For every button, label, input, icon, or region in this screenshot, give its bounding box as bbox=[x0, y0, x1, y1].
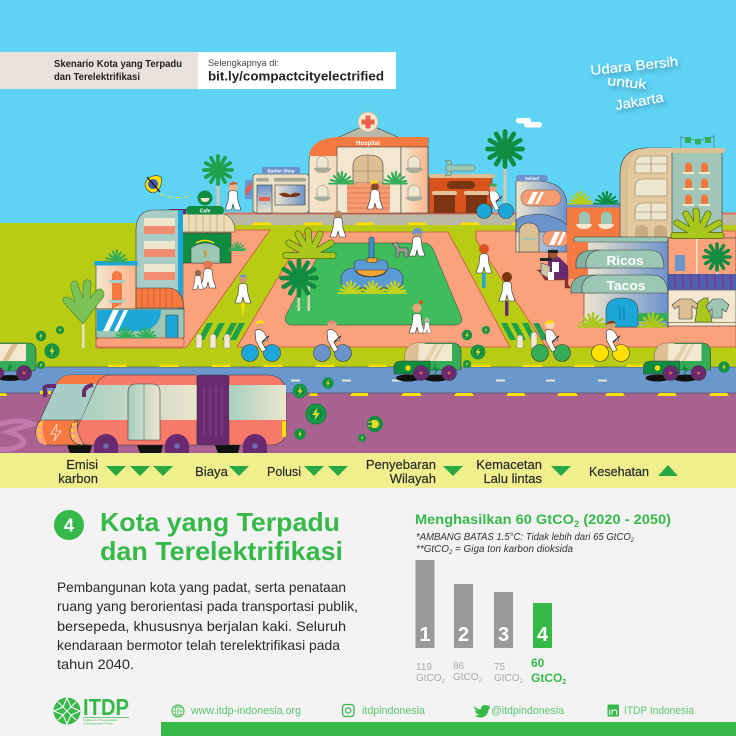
bar 3: GtCO bbox=[494, 673, 520, 684]
bus accordion joint bbox=[197, 375, 229, 445]
scenario description: ruang yang berorientasi pada transportasi publik, bbox=[57, 598, 358, 614]
bar 1 bbox=[416, 560, 446, 685]
school sign: School bbox=[525, 176, 539, 181]
bar 3: 2 bbox=[520, 679, 524, 685]
person on hospital steps bbox=[367, 180, 383, 209]
palm tree by cafe bbox=[204, 156, 232, 207]
school bbox=[516, 175, 569, 252]
back street bbox=[225, 212, 736, 225]
Ricos awning: Ricos bbox=[606, 253, 644, 268]
hospital cross emblem bbox=[358, 112, 378, 132]
indicator: cost bbox=[195, 464, 249, 479]
plug badge bbox=[367, 416, 383, 432]
logo emblem bbox=[54, 698, 80, 724]
cafe name sign: Cafe bbox=[200, 208, 211, 214]
road graffiti bbox=[0, 421, 33, 449]
indicator: carbon emissions: karbon bbox=[58, 471, 98, 486]
teal apartment building bbox=[136, 210, 183, 338]
background sky bbox=[0, 0, 736, 223]
person with child on lawn bbox=[409, 300, 425, 333]
hospital bbox=[309, 112, 428, 213]
scenario number badge bbox=[54, 510, 84, 540]
clothes shop bbox=[668, 274, 736, 326]
cyclist blue wheels bbox=[242, 320, 280, 362]
scenario description: Pembangunan kota yang padat, serta penataan bbox=[57, 579, 346, 595]
drone icon bbox=[145, 176, 190, 198]
bar 3: 75 bbox=[494, 662, 506, 673]
bar 4: 2 bbox=[562, 679, 566, 686]
dog bbox=[392, 242, 408, 257]
central lawn bbox=[285, 243, 462, 325]
low building left bbox=[94, 261, 184, 347]
header link: bit.ly/compactcityelectrified bbox=[208, 68, 384, 84]
slogan: clean air for Jakarta: Jakarta bbox=[614, 90, 665, 113]
cafe round sign bbox=[198, 190, 212, 206]
child and adult on left plaza bbox=[200, 260, 216, 288]
plants on low building bbox=[105, 242, 245, 338]
cafe building bbox=[160, 190, 235, 263]
bus rear segment bbox=[36, 375, 110, 445]
right plaza bbox=[476, 231, 736, 347]
electric bolt badges bbox=[36, 326, 730, 442]
bar 3 bbox=[494, 592, 524, 685]
palm tree by workshop bbox=[488, 132, 522, 206]
clouds bbox=[516, 118, 542, 128]
chart title: Menghasilkan 60 GtCO bbox=[415, 511, 567, 527]
indicator: carbon emissions bbox=[58, 457, 173, 486]
car left bbox=[0, 343, 36, 381]
indicator: pollution: Polusi bbox=[267, 464, 301, 479]
tall tan building bbox=[620, 148, 672, 237]
left plaza bbox=[96, 230, 270, 348]
bar 4: 4 bbox=[537, 624, 549, 646]
indicator: cost: Biaya bbox=[195, 464, 229, 479]
fountain plants bbox=[338, 282, 406, 293]
electric cars bbox=[0, 343, 710, 382]
crosswalk left bbox=[196, 323, 245, 348]
palm tree on plaza bbox=[282, 256, 316, 311]
barber shop bbox=[245, 167, 309, 213]
bar 4: GtCO bbox=[531, 671, 562, 685]
bar 1: GtCO bbox=[416, 673, 442, 684]
taco shop door bbox=[606, 298, 638, 327]
cyclist periwinkle wheels bbox=[314, 320, 352, 362]
person on top of lawn bbox=[330, 210, 346, 237]
car centre bbox=[394, 343, 461, 382]
fountain bbox=[341, 237, 403, 293]
header bar bbox=[0, 52, 396, 89]
purple busway bbox=[0, 393, 736, 453]
scenario description: tahun 2040. bbox=[57, 656, 134, 672]
chart title: (2020 - 2050) bbox=[579, 511, 671, 527]
indicator: health bbox=[589, 464, 678, 479]
header link: Selengkapnya di: bbox=[208, 58, 279, 69]
scenario description: kendaraan bermotor telah terelektrifikasi pada bbox=[57, 637, 340, 653]
indicator: sprawl bbox=[366, 457, 463, 486]
centre plaza bbox=[237, 232, 510, 347]
hospital window sills bbox=[314, 168, 423, 201]
plazas bbox=[96, 230, 736, 348]
logo wordmark: ITDP bbox=[83, 694, 129, 720]
person walking dog bbox=[409, 228, 425, 256]
teal tower bbox=[671, 135, 725, 237]
indicator: health: Kesehatan bbox=[589, 464, 649, 479]
bar 4 bbox=[531, 603, 566, 686]
bar 2: 86 bbox=[453, 661, 465, 672]
footer: twitter: @itdpindonesia bbox=[491, 705, 565, 717]
cyclist yellow wheels bbox=[592, 320, 630, 362]
leaf tree bbox=[63, 280, 104, 348]
blue road bbox=[0, 364, 736, 393]
slogan: clean air for Jakarta bbox=[590, 54, 679, 113]
scenario number badge: 4 bbox=[64, 516, 74, 536]
indicator: congestion bbox=[476, 457, 571, 486]
bus door bbox=[128, 384, 160, 440]
roof flags bbox=[681, 135, 714, 148]
chart title: 2 bbox=[574, 519, 579, 529]
bar chart bbox=[416, 560, 566, 686]
bus middle segment bbox=[70, 375, 197, 445]
large fan plant bbox=[286, 231, 333, 256]
indicator: congestion: Kemacetan bbox=[476, 457, 542, 472]
footer: linkedin: ITDP Indonesia bbox=[624, 705, 695, 717]
wrench sign bbox=[445, 160, 475, 176]
bar 1: 2 bbox=[442, 679, 446, 685]
chart notes: 2 bbox=[630, 538, 635, 544]
bar 2: GtCO bbox=[453, 672, 479, 683]
barber shop sign: Barber Shop bbox=[267, 168, 295, 174]
header scenario title: dan Terelektrifikasi bbox=[54, 72, 140, 83]
scenario heading: dan Terelektrifikasi bbox=[100, 536, 343, 566]
person walking, left plaza edge bbox=[235, 274, 251, 317]
hospital label: Hospital bbox=[356, 141, 380, 147]
footer green bar bbox=[161, 722, 736, 736]
indicator: carbon emissions: Emisi bbox=[66, 457, 98, 472]
bar 1: 119 bbox=[416, 662, 432, 673]
bottom panel background bbox=[0, 488, 736, 736]
salmon building right bbox=[668, 211, 736, 278]
footer: instagram: itdpindonesia bbox=[362, 705, 426, 717]
impact indicator band bbox=[0, 453, 736, 488]
person reading on chair bbox=[537, 250, 570, 288]
logo tagline: & Development Policy bbox=[83, 722, 113, 726]
cyclist top right bbox=[476, 184, 514, 218]
chart notes: *AMBANG BATAS 1.5°C: Tidak lebih dari 65 GtCO bbox=[416, 532, 641, 543]
chart notes: 2 bbox=[448, 550, 453, 556]
header scenario title: Skenario Kota yang Terpadu bbox=[54, 59, 182, 70]
slogan: clean air for Jakarta: Udara Bersih bbox=[590, 54, 679, 78]
person by cafe bbox=[225, 182, 241, 210]
bar 1: 1 bbox=[419, 624, 431, 646]
bus wheels bbox=[94, 434, 267, 453]
crosswalk right bbox=[501, 323, 548, 348]
footer: website: www.itdp-indonesia.org bbox=[190, 705, 301, 717]
logo tagline: Institute for Transportation bbox=[83, 718, 118, 722]
bus front segment bbox=[229, 375, 286, 445]
cyclist green wheels bbox=[532, 320, 570, 362]
chart notes: = Giga ton karbon dioksida bbox=[452, 544, 573, 555]
orange building bbox=[565, 192, 623, 267]
indicator: sprawl: Wilayah bbox=[390, 471, 436, 486]
person walking upper right strip bbox=[476, 244, 492, 288]
bar 4: 60 bbox=[531, 656, 545, 670]
indicator: pollution bbox=[267, 464, 348, 479]
hospital side windows bbox=[317, 156, 420, 197]
person walking lower right strip bbox=[499, 272, 515, 316]
bar 3: 3 bbox=[498, 624, 509, 646]
taco shop bbox=[568, 237, 668, 327]
cyclists bbox=[242, 184, 630, 362]
chart notes bbox=[416, 532, 635, 556]
scenario description: bersepeda, khususnya berjalan kaki. Seluruh bbox=[57, 618, 346, 634]
ITDP logo bbox=[54, 694, 129, 726]
indicator: congestion: Lalu lintas bbox=[483, 471, 542, 486]
indicator: sprawl: Penyebaran bbox=[366, 457, 436, 472]
bar 2: 2 bbox=[479, 678, 483, 684]
scenario heading: Kota yang Terpadu bbox=[100, 507, 340, 537]
Tacos awning: Tacos bbox=[606, 278, 646, 293]
bar 2 bbox=[453, 584, 483, 684]
bar 2: 2 bbox=[458, 624, 469, 646]
bus black shadows bbox=[67, 445, 240, 453]
car right bbox=[644, 343, 710, 382]
pedestrians bbox=[192, 180, 515, 333]
workshop bbox=[429, 160, 495, 213]
slogan: clean air for Jakarta: untuk bbox=[607, 73, 647, 92]
ground bbox=[0, 223, 736, 368]
chart notes: **GtCO bbox=[416, 544, 449, 555]
electric articulated bus bbox=[36, 375, 286, 453]
